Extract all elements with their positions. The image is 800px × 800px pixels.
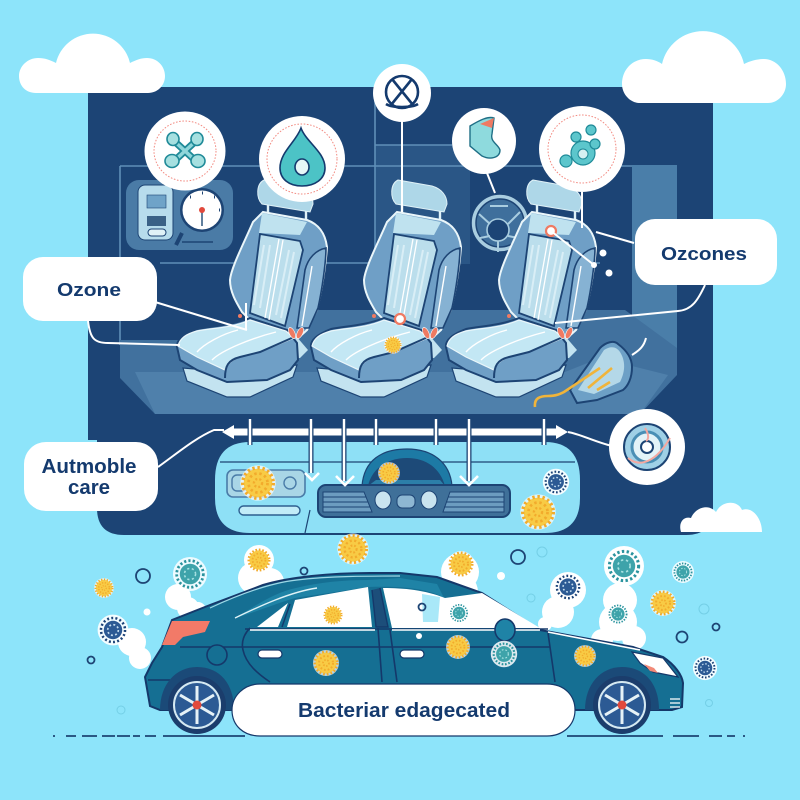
seat 1 bbox=[177, 180, 327, 397]
air vents bbox=[318, 485, 510, 517]
roof shade bbox=[235, 578, 444, 618]
callout: Automobile care: care bbox=[68, 477, 110, 499]
tail light bbox=[162, 621, 210, 645]
callout: Ozone bbox=[23, 257, 157, 321]
label: Bacterial bbox=[232, 684, 575, 736]
arrow bar bbox=[222, 419, 568, 485]
dashboard cluster bbox=[126, 180, 233, 250]
sky patch in window bbox=[422, 594, 440, 622]
callout: Automobile care: Autmoble bbox=[42, 456, 136, 478]
car bbox=[145, 573, 683, 734]
icon: water drop bbox=[259, 116, 345, 202]
white dots bbox=[591, 250, 612, 276]
icon: crossed circle bbox=[373, 64, 431, 122]
bubbles bbox=[88, 547, 720, 714]
rear wheel bbox=[160, 667, 234, 734]
radio bbox=[227, 470, 305, 515]
bonnet highlight bbox=[548, 632, 640, 650]
grille bbox=[670, 699, 680, 707]
interior back wall bbox=[120, 100, 677, 360]
virus on seat 2 bbox=[384, 336, 402, 354]
cable and pouch bbox=[535, 338, 646, 407]
door handles bbox=[258, 650, 282, 658]
panel: car interior bbox=[88, 87, 713, 535]
marker: seat 2 bbox=[395, 314, 405, 324]
callout: Ozone: Ozone bbox=[57, 280, 121, 300]
label: Bacterial: Bacteriar edagecated bbox=[298, 700, 510, 722]
viruses around car bbox=[94, 533, 717, 680]
cloud: top right bbox=[622, 31, 786, 103]
fuel cap bbox=[207, 645, 227, 665]
seat 3 bbox=[446, 180, 596, 397]
middle window bbox=[287, 587, 372, 627]
pillars bbox=[282, 588, 388, 627]
steering wheel bbox=[471, 194, 529, 252]
roof highlight bbox=[210, 576, 400, 608]
callout: Ozcones: Ozcones bbox=[661, 244, 747, 264]
icon: no-contamination disc bbox=[609, 409, 685, 485]
icon: air duct bbox=[452, 108, 516, 174]
cloud: top left bbox=[19, 34, 165, 93]
icon: bubbles bbox=[539, 106, 625, 192]
front wheel bbox=[585, 667, 659, 734]
dashboard band bbox=[215, 442, 580, 533]
cloud: panel corner bbox=[680, 503, 762, 532]
viruses on dashboard bbox=[240, 462, 569, 530]
ground line bbox=[53, 735, 745, 737]
smoke clouds behind car bbox=[118, 545, 646, 669]
marker: seat 3 bbox=[546, 226, 556, 236]
floor bbox=[120, 310, 677, 414]
rear window bbox=[257, 603, 288, 627]
instrument arch bbox=[362, 449, 452, 486]
body bbox=[145, 573, 683, 710]
callout lines bbox=[88, 121, 705, 467]
seat 2 bbox=[311, 180, 461, 397]
headlight bbox=[632, 652, 678, 677]
callout: Automobile care bbox=[24, 442, 158, 511]
front window bbox=[383, 588, 540, 628]
mirror bbox=[495, 619, 515, 641]
door lines bbox=[148, 628, 555, 682]
callout: Ozcones bbox=[635, 219, 777, 285]
icon: molecule cross bbox=[144, 112, 226, 190]
